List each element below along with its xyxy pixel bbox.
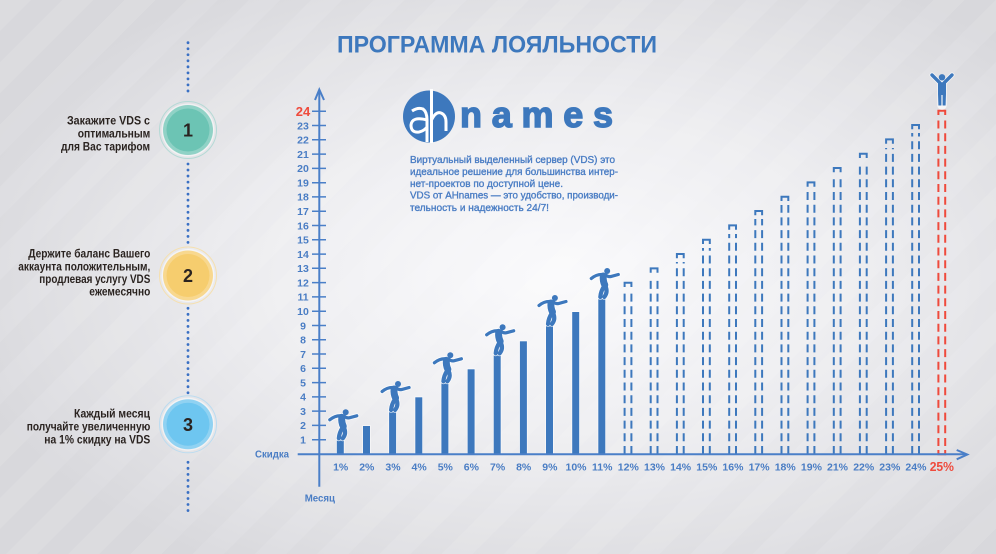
x axis labels: 14%: [670, 462, 692, 474]
y axis labels: 20: [297, 163, 309, 175]
y axis ticks: [312, 111, 326, 440]
step 2: [18, 247, 216, 304]
icon: step 3 circle: [160, 396, 216, 453]
description text: идеальное решение для большинства интер-: [410, 166, 618, 178]
x axis labels: 23%: [879, 462, 901, 474]
x axis labels: 16%: [722, 462, 744, 474]
axis label: Скидка: Скидка: [255, 448, 289, 460]
x axis labels: 21%: [827, 462, 849, 474]
text: step 2: продлевая услугу VDS: [39, 274, 151, 286]
x axis labels: 22%: [853, 462, 875, 474]
y axis labels: 17: [297, 206, 309, 218]
text: step 2: Держите баланс Вашего: [28, 249, 150, 261]
title: ПРОГРАММА ЛОЯЛЬНОСТИ: [337, 32, 657, 59]
x axis labels: 24%: [905, 462, 927, 474]
text: step 2: аккаунта положительным,: [18, 261, 150, 273]
x axis labels: 25%: [930, 459, 954, 474]
y axis labels: 24: [296, 104, 311, 119]
y axis labels: 11: [297, 292, 309, 304]
y axis labels: 4: [300, 392, 306, 404]
x axis labels: [333, 459, 954, 474]
icon: step 1 circle: 1: [183, 120, 193, 140]
text: step 2: ежемесячно: [89, 286, 150, 298]
y axis labels: 10: [297, 306, 309, 318]
x axis labels: 15%: [696, 462, 718, 474]
y axis labels: 1: [300, 434, 306, 446]
y axis labels: 2: [300, 420, 306, 432]
y axis labels: 8: [300, 334, 306, 346]
text: step 1: оптимальным: [78, 129, 150, 141]
text: step 3: [27, 409, 151, 447]
description text: нет-проектов по доступной цене.: [410, 178, 563, 190]
y axis labels: 9: [300, 320, 306, 332]
description text: Виртуальный выделенный сервер (VDS) это: [410, 154, 615, 166]
text: step 3: на 1% скидку на VDS: [44, 435, 151, 447]
y axis labels: 3: [300, 406, 306, 418]
y axis labels: 23: [297, 120, 309, 132]
x axis labels: 2%: [359, 462, 375, 474]
icon: logo circle: [403, 89, 455, 143]
x axis labels: 7%: [490, 462, 506, 474]
text: step 3: Каждый месяц: [74, 409, 150, 421]
y axis labels: 15: [297, 235, 309, 247]
step 1: [61, 102, 216, 158]
x axis labels: 19%: [801, 462, 823, 474]
y axis labels: 12: [297, 277, 309, 289]
icon: standing figure with raised arms: [932, 74, 952, 106]
icon: step 1 circle: [160, 102, 216, 158]
x axis labels: 6%: [464, 462, 480, 474]
icons: skating figures on odd bars: [330, 268, 618, 438]
y axis labels: 21: [297, 149, 309, 161]
y axis labels: 5: [300, 377, 306, 389]
logo: AHnames: [403, 89, 613, 143]
y axis labels: 16: [297, 220, 309, 232]
axes: [298, 90, 967, 487]
y axis labels: 22: [297, 135, 309, 147]
icon: step 2 circle: 2: [183, 266, 193, 286]
x axis labels: 17%: [749, 462, 770, 474]
description text: VDS от AHnames — это удобство, производи-: [410, 190, 618, 202]
text: step 2: [18, 249, 151, 298]
x axis labels: 8%: [516, 462, 532, 474]
y axis labels: 18: [297, 192, 309, 204]
icon: step 2 circle: [160, 247, 216, 304]
x axis labels: 1%: [333, 462, 349, 474]
y axis labels: [296, 104, 311, 446]
step 3: [27, 396, 217, 453]
x axis labels: 4%: [412, 462, 427, 474]
text: step 1: Закажите VDS с: [67, 116, 151, 128]
y axis labels: 14: [297, 249, 309, 261]
text: step 1: для Вас тарифом: [61, 142, 150, 154]
x axis labels: 3%: [385, 462, 401, 474]
text: step 1: [61, 116, 151, 154]
logo wordmark: names: [460, 94, 613, 135]
description text: тельность и надежность 24/7!: [410, 202, 549, 214]
x axis labels: 12%: [618, 462, 639, 474]
y axis labels: 6: [300, 363, 306, 375]
solid bars: months 1-11: [337, 299, 605, 454]
x axis labels: 13%: [644, 462, 666, 474]
text: step 3: получайте увеличенную: [27, 422, 150, 434]
y axis labels: 19: [297, 178, 309, 190]
description text: [410, 154, 618, 214]
dashed bars: months 12-23: [625, 125, 919, 454]
dotted timeline: [187, 43, 189, 511]
y axis labels: 7: [300, 349, 306, 361]
axis label: Месяц: Месяц: [305, 492, 335, 504]
x axis labels: 5%: [438, 462, 454, 474]
x axis labels: 10%: [565, 462, 587, 474]
y axis labels: 13: [297, 263, 309, 275]
x axis labels: 11%: [592, 462, 613, 474]
x axis labels: 9%: [542, 462, 558, 474]
x axis labels: 18%: [775, 462, 796, 474]
chart: loyalty discount staircase: [255, 74, 967, 504]
dashed red bar: final month: [938, 111, 945, 454]
icon: step 3 circle: 3: [183, 415, 193, 435]
